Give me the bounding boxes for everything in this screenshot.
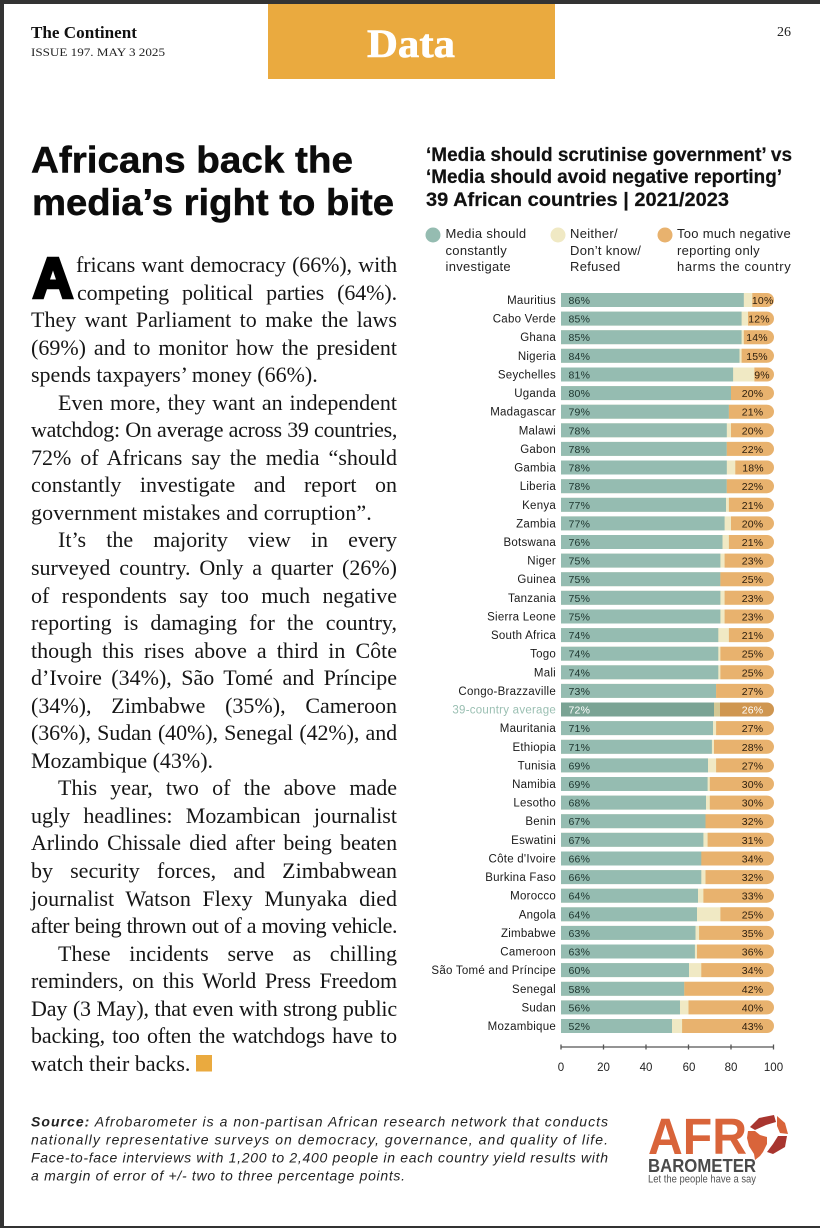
bar: Nigeria — [518, 349, 774, 363]
article body text: journalist Watson Flexy Munyaka died — [31, 886, 397, 911]
bar: Niger: Niger — [527, 556, 556, 568]
bar: Seychelles: 9% — [754, 370, 770, 382]
bar: Mauritius — [507, 293, 774, 307]
masthead: The Continent: ISSUE 197. MAY 3 2025 — [31, 45, 165, 59]
x axis: 100 — [764, 1062, 783, 1074]
x axis: 20 — [597, 1062, 610, 1074]
bar: Botswana — [503, 535, 774, 549]
bar: Mali: 74% — [568, 667, 590, 679]
bar: Togo: 74% — [568, 649, 590, 661]
bar: Eswatini — [511, 833, 774, 847]
bar: Togo — [530, 647, 774, 661]
bar: 39-country average: 72% — [568, 704, 590, 716]
bar: Mozambique — [488, 1019, 774, 1033]
bar: Nigeria: Nigeria — [518, 351, 556, 363]
bar: Seychelles: Seychelles — [498, 370, 556, 382]
article body text: reminders, on this World Press Freedom — [31, 968, 397, 993]
bar: Mozambique: 43% — [742, 1021, 763, 1033]
article body text: It’s the majority view in every — [58, 527, 397, 552]
bar: Benin: 67% — [568, 816, 590, 828]
bar: Liberia: 78% — [568, 481, 590, 493]
bar: Zimbabwe — [501, 926, 774, 940]
bar: Nigeria: 84% — [568, 351, 590, 363]
bar: Kenya: Kenya — [522, 500, 556, 512]
article body text: reporting is damaging for the country, — [31, 610, 397, 635]
bar: Côte d'Ivoire: 34% — [742, 854, 763, 866]
bar: Guinea — [517, 572, 774, 586]
legend item: investigate: constantly — [446, 243, 507, 258]
article body text: backing, too often the watchdogs have to — [31, 1023, 397, 1048]
article body text: Day (3 May), that even with strong public — [31, 996, 397, 1021]
bar: South Africa: 74% — [568, 630, 590, 642]
bar: Zambia: 20% — [742, 518, 763, 530]
bar: Congo-Brazzaville: Congo-Brazzaville — [458, 686, 556, 698]
bar: Benin: 32% — [742, 816, 763, 828]
source note: Source: Afrobarometer is a non-partisan African research network that conducts — [31, 1114, 608, 1130]
bar: Zambia: 77% — [568, 518, 590, 530]
bar: Gabon: Gabon — [520, 444, 556, 456]
legend item: negative reporting: Too much negative — [677, 226, 791, 241]
bar: Morocco: Morocco — [510, 891, 556, 903]
article body text — [30, 252, 397, 1076]
bar: Guinea: 75% — [568, 574, 590, 586]
bar: Ghana: 14% — [746, 332, 768, 344]
bar: Botswana: 76% — [568, 537, 590, 549]
bar: Sudan — [521, 1000, 774, 1014]
bar: Mauritania — [500, 721, 774, 735]
bar: Togo: Togo — [530, 649, 556, 661]
legend item: neither — [550, 226, 641, 274]
bar: Ghana: 85% — [568, 332, 590, 344]
bar: Liberia — [520, 479, 774, 493]
bar: Cabo Verde: 12% — [748, 314, 770, 326]
legend item: negative reporting: harms the country — [677, 259, 791, 274]
bar: Uganda: 80% — [568, 388, 590, 400]
bar: Guinea: 25% — [742, 574, 763, 586]
bar: Liberia: 22% — [742, 481, 763, 493]
bar: Liberia: Liberia — [520, 481, 556, 493]
bar: Gambia: 18% — [742, 462, 764, 474]
bar: Sierra Leone: 75% — [568, 612, 590, 624]
article body text: Arlindo Chissale died after being beaten — [31, 830, 397, 855]
chart title: ‘Media should scrutinise government’ vs — [426, 145, 792, 166]
bar: Guinea: Guinea — [517, 574, 556, 586]
bar: Seychelles: 81% — [568, 370, 590, 382]
stacked bar chart — [431, 293, 783, 1074]
article body text: government mistakes and corruption”. — [31, 500, 372, 525]
article body text: (34%), Zimbabwe (35%), Cameroon — [31, 693, 397, 718]
bar: Congo-Brazzaville: 27% — [742, 686, 763, 698]
bar: Madagascar: 79% — [568, 407, 590, 419]
bar: South Africa — [491, 628, 774, 642]
bar: Gambia: 78% — [568, 462, 590, 474]
bar: Burkina Faso — [485, 870, 774, 884]
bar: Ethiopia: 28% — [742, 742, 763, 754]
bar: Gabon — [520, 442, 774, 456]
bar: Eswatini: 31% — [742, 835, 763, 847]
bar: Mauritius: 10% — [752, 295, 774, 307]
bar: Tunisia: 27% — [742, 760, 763, 772]
bar: Tunisia: 69% — [568, 760, 590, 772]
bar: Lesotho: 30% — [742, 798, 763, 810]
bar: Morocco: 64% — [568, 891, 590, 903]
bar: São Tomé and Príncipe — [431, 963, 774, 977]
article body text: competing political parties (64%). — [77, 280, 397, 305]
bar: Niger: 75% — [568, 556, 590, 568]
bar: São Tomé and Príncipe: 60% — [568, 965, 590, 977]
logo: Afrobarometer — [648, 1108, 788, 1186]
article body text: of respondents say too much negative — [31, 583, 397, 608]
bar: Angola: Angola — [519, 909, 556, 921]
bar: 39-country average: 26% — [742, 704, 763, 716]
bar: Eswatini: 67% — [568, 835, 590, 847]
bar: Gambia: Gambia — [514, 462, 556, 474]
logo: Afrobarometer: BAROMETER — [648, 1156, 756, 1176]
bar: Botswana: 21% — [742, 537, 763, 549]
end-of-article square — [196, 1055, 212, 1072]
bar: Angola: 64% — [568, 909, 590, 921]
article body text: They want Parliament to make the laws — [31, 307, 397, 332]
bar: Zimbabwe: Zimbabwe — [501, 928, 556, 940]
bar: Kenya: 21% — [742, 500, 763, 512]
x axis: 60 — [683, 1062, 695, 1074]
article body text: surveyed country. Only a quarter (26%) — [31, 555, 397, 580]
bar: Namibia: 30% — [742, 779, 763, 791]
bar: Sierra Leone: Sierra Leone — [487, 612, 556, 624]
bar: Congo-Brazzaville — [458, 684, 774, 698]
logo: Afrobarometer: AFR — [648, 1108, 747, 1165]
article body text: Mozambique (43%). — [31, 748, 213, 773]
source note — [31, 1114, 608, 1184]
chart title: ‘Media should avoid negative reporting’ — [426, 167, 782, 188]
bar: Mauritius: Mauritius — [507, 295, 556, 307]
bar: Lesotho: 68% — [568, 798, 590, 810]
bar: Malawi — [519, 423, 774, 437]
chart title: 39 African countries | 2021/2023 — [426, 190, 729, 211]
bar: Lesotho — [513, 796, 774, 810]
bar: Tunisia — [518, 758, 774, 772]
bar: 39-country average: 39-country average — [452, 704, 556, 716]
bar: Lesotho: Lesotho — [513, 798, 556, 810]
source note: Face-to-face interviews with 1,200 to 2,400 people in each country yield results with — [31, 1150, 608, 1166]
bar: Malawi: Malawi — [519, 425, 556, 437]
bar: Botswana: Botswana — [503, 537, 556, 549]
legend item: neither: Refused — [570, 259, 621, 274]
bar: Kenya — [522, 498, 774, 512]
masthead: The Continent — [31, 23, 165, 59]
bar: Kenya: 77% — [568, 500, 590, 512]
bar: Madagascar: 21% — [742, 407, 763, 419]
bar: Cabo Verde: Cabo Verde — [493, 314, 556, 326]
article body text: (69%) and to monitor how the president — [31, 335, 397, 360]
bar: Ethiopia — [512, 740, 774, 754]
bar: Cameroon: 63% — [568, 946, 590, 958]
bar: Burkina Faso: 66% — [568, 872, 590, 884]
bar: Côte d'Ivoire: 66% — [568, 854, 590, 866]
bar: Nigeria: 15% — [746, 351, 768, 363]
bar: Mauritania: 27% — [742, 723, 763, 735]
chart title — [426, 145, 792, 211]
bar: Benin — [525, 814, 774, 828]
bar: Cabo Verde: 85% — [568, 314, 590, 326]
bar: Ethiopia: 71% — [568, 742, 590, 754]
bar: Mali: 25% — [742, 667, 763, 679]
bar: São Tomé and Príncipe: São Tomé and Príncipe — [431, 965, 556, 977]
bar: Congo-Brazzaville: 73% — [568, 686, 590, 698]
article body text: after being thrown out of a moving vehicle. — [31, 913, 397, 938]
x axis: 40 — [640, 1062, 652, 1074]
bar: Togo: 25% — [742, 649, 763, 661]
article body text: watch their backs. — [31, 1051, 190, 1076]
article body text: This year, two of the above made — [58, 775, 397, 800]
bar: Senegal: 42% — [742, 984, 763, 996]
bar: Namibia: 69% — [568, 779, 590, 791]
bar: Sudan: Sudan — [521, 1002, 556, 1014]
logo: Afrobarometer: Let the people have a say — [648, 1174, 756, 1186]
bar: Gabon: 78% — [568, 444, 590, 456]
bar: Sierra Leone: 23% — [742, 612, 763, 624]
bar: Morocco — [510, 889, 774, 903]
bar: Uganda: Uganda — [514, 388, 556, 400]
bar: Madagascar: Madagascar — [490, 407, 556, 419]
bar: Niger: 23% — [742, 556, 763, 568]
bar: Tanzania: 75% — [568, 593, 590, 605]
bar: Mauritius: 86% — [568, 295, 590, 307]
article body text: constantly investigate and report on — [31, 472, 397, 497]
bar: Sudan: 40% — [742, 1002, 763, 1014]
bar: Senegal: 58% — [568, 984, 590, 996]
bar: South Africa: South Africa — [491, 630, 556, 642]
bar: Gabon: 22% — [742, 444, 763, 456]
bar: Zimbabwe: 63% — [568, 928, 590, 940]
source note: nationally representative surveys on democracy, governance, and quality of life. — [31, 1132, 608, 1148]
bar: São Tomé and Príncipe: 34% — [742, 965, 763, 977]
legend item: negative reporting — [658, 226, 791, 274]
bar: Malawi: 20% — [742, 425, 763, 437]
bar: Cabo Verde — [493, 312, 774, 326]
article headline: media’s right to bite — [32, 182, 394, 223]
x axis: 0 — [558, 1062, 564, 1074]
article body text: spends taxpayers’ money (66%). — [31, 362, 318, 387]
bar: Malawi: 78% — [568, 425, 590, 437]
legend item: investigate — [426, 226, 526, 274]
x axis: 80 — [725, 1062, 737, 1074]
bar: Zambia: Zambia — [516, 518, 556, 530]
bar: Burkina Faso: 32% — [742, 872, 763, 884]
bar: Zambia — [516, 516, 774, 530]
bar: Ghana: Ghana — [520, 332, 556, 344]
legend item: neither: Neither/ — [570, 226, 618, 241]
bar: Ethiopia: Ethiopia — [512, 742, 556, 754]
bar: Tanzania: 23% — [742, 593, 763, 605]
bar: Ghana — [520, 330, 774, 344]
bar: Angola: 25% — [742, 909, 763, 921]
bar: Zimbabwe: 35% — [742, 928, 763, 940]
article headline — [31, 140, 394, 223]
section banner: Data: Data — [367, 21, 455, 66]
source note: a margin of error of +/- two to three percentage points. — [31, 1168, 405, 1184]
bar: Sierra Leone — [487, 610, 774, 624]
legend item: neither: Don’t know/ — [570, 243, 641, 258]
article body text: watchdog: On average across 39 countries, — [31, 417, 397, 442]
bar: Tunisia: Tunisia — [518, 760, 556, 772]
article body text: These incidents serve as chilling — [58, 941, 397, 966]
bar: Côte d'Ivoire: Côte d'Ivoire — [489, 854, 556, 866]
bar: Tanzania: Tanzania — [508, 593, 556, 605]
bar: Niger — [527, 554, 774, 568]
section banner: Data — [268, 4, 555, 79]
bar: Mozambique: 52% — [568, 1021, 590, 1033]
bar: Uganda: 20% — [742, 388, 763, 400]
bar: Angola — [519, 907, 774, 921]
bar: Côte d'Ivoire — [489, 852, 774, 866]
article body text: Even more, they want an independent — [58, 390, 397, 415]
bar: Mauritania: 71% — [568, 723, 590, 735]
page number: 26 — [777, 25, 791, 40]
article body text: ugly headlines: Mozambican journalist — [31, 803, 397, 828]
bar: Seychelles — [498, 368, 774, 382]
bar: Sudan: 56% — [568, 1002, 590, 1014]
article body text: (36%), Sudan (40%), Senegal (42%), and — [31, 720, 397, 745]
article body text: d’Ivoire (34%), São Tomé and Príncipe — [31, 665, 397, 690]
bar: Namibia — [512, 777, 774, 791]
article headline: Africans back the — [31, 140, 353, 180]
bar: Cameroon: Cameroon — [500, 946, 556, 958]
legend item: investigate: Media should — [446, 226, 526, 241]
bar: Gambia — [514, 460, 774, 474]
bar: South Africa: 21% — [742, 630, 763, 642]
bar: Eswatini: Eswatini — [511, 835, 556, 847]
article body text: by security forces, and Zimbabwean — [31, 858, 397, 883]
bar: Morocco: 33% — [742, 891, 763, 903]
article body text: though this rises above a third in Côte — [31, 638, 397, 663]
masthead: The Continent: The Continent — [31, 23, 138, 42]
legend item: investigate: investigate — [446, 259, 511, 274]
bar: Cameroon — [500, 944, 774, 958]
logo icon: speech bubble with Africa — [747, 1115, 788, 1160]
bar: Mali — [534, 665, 774, 679]
legend — [426, 226, 791, 274]
bar: Senegal — [512, 982, 774, 996]
bar: Mali: Mali — [534, 667, 556, 679]
bar: 39-country average — [452, 702, 774, 716]
article body text: fricans want democracy (66%), with — [76, 252, 397, 277]
bar: Madagascar — [490, 405, 774, 419]
bar: Benin: Benin — [525, 816, 556, 828]
bar: Tanzania — [508, 591, 774, 605]
bar: Mauritania: Mauritania — [500, 723, 556, 735]
legend item: negative reporting: reporting only — [677, 243, 760, 258]
bar: Mozambique: Mozambique — [488, 1021, 556, 1033]
article body text: 72% of Africans say the media “should — [31, 445, 397, 470]
bar: Burkina Faso: Burkina Faso — [485, 872, 556, 884]
bar: Uganda — [514, 386, 774, 400]
bar: Namibia: Namibia — [512, 779, 556, 791]
x axis — [558, 1044, 783, 1074]
bar: Senegal: Senegal — [512, 984, 556, 996]
bar: Cameroon: 36% — [742, 946, 763, 958]
drop cap A: A — [33, 246, 73, 310]
